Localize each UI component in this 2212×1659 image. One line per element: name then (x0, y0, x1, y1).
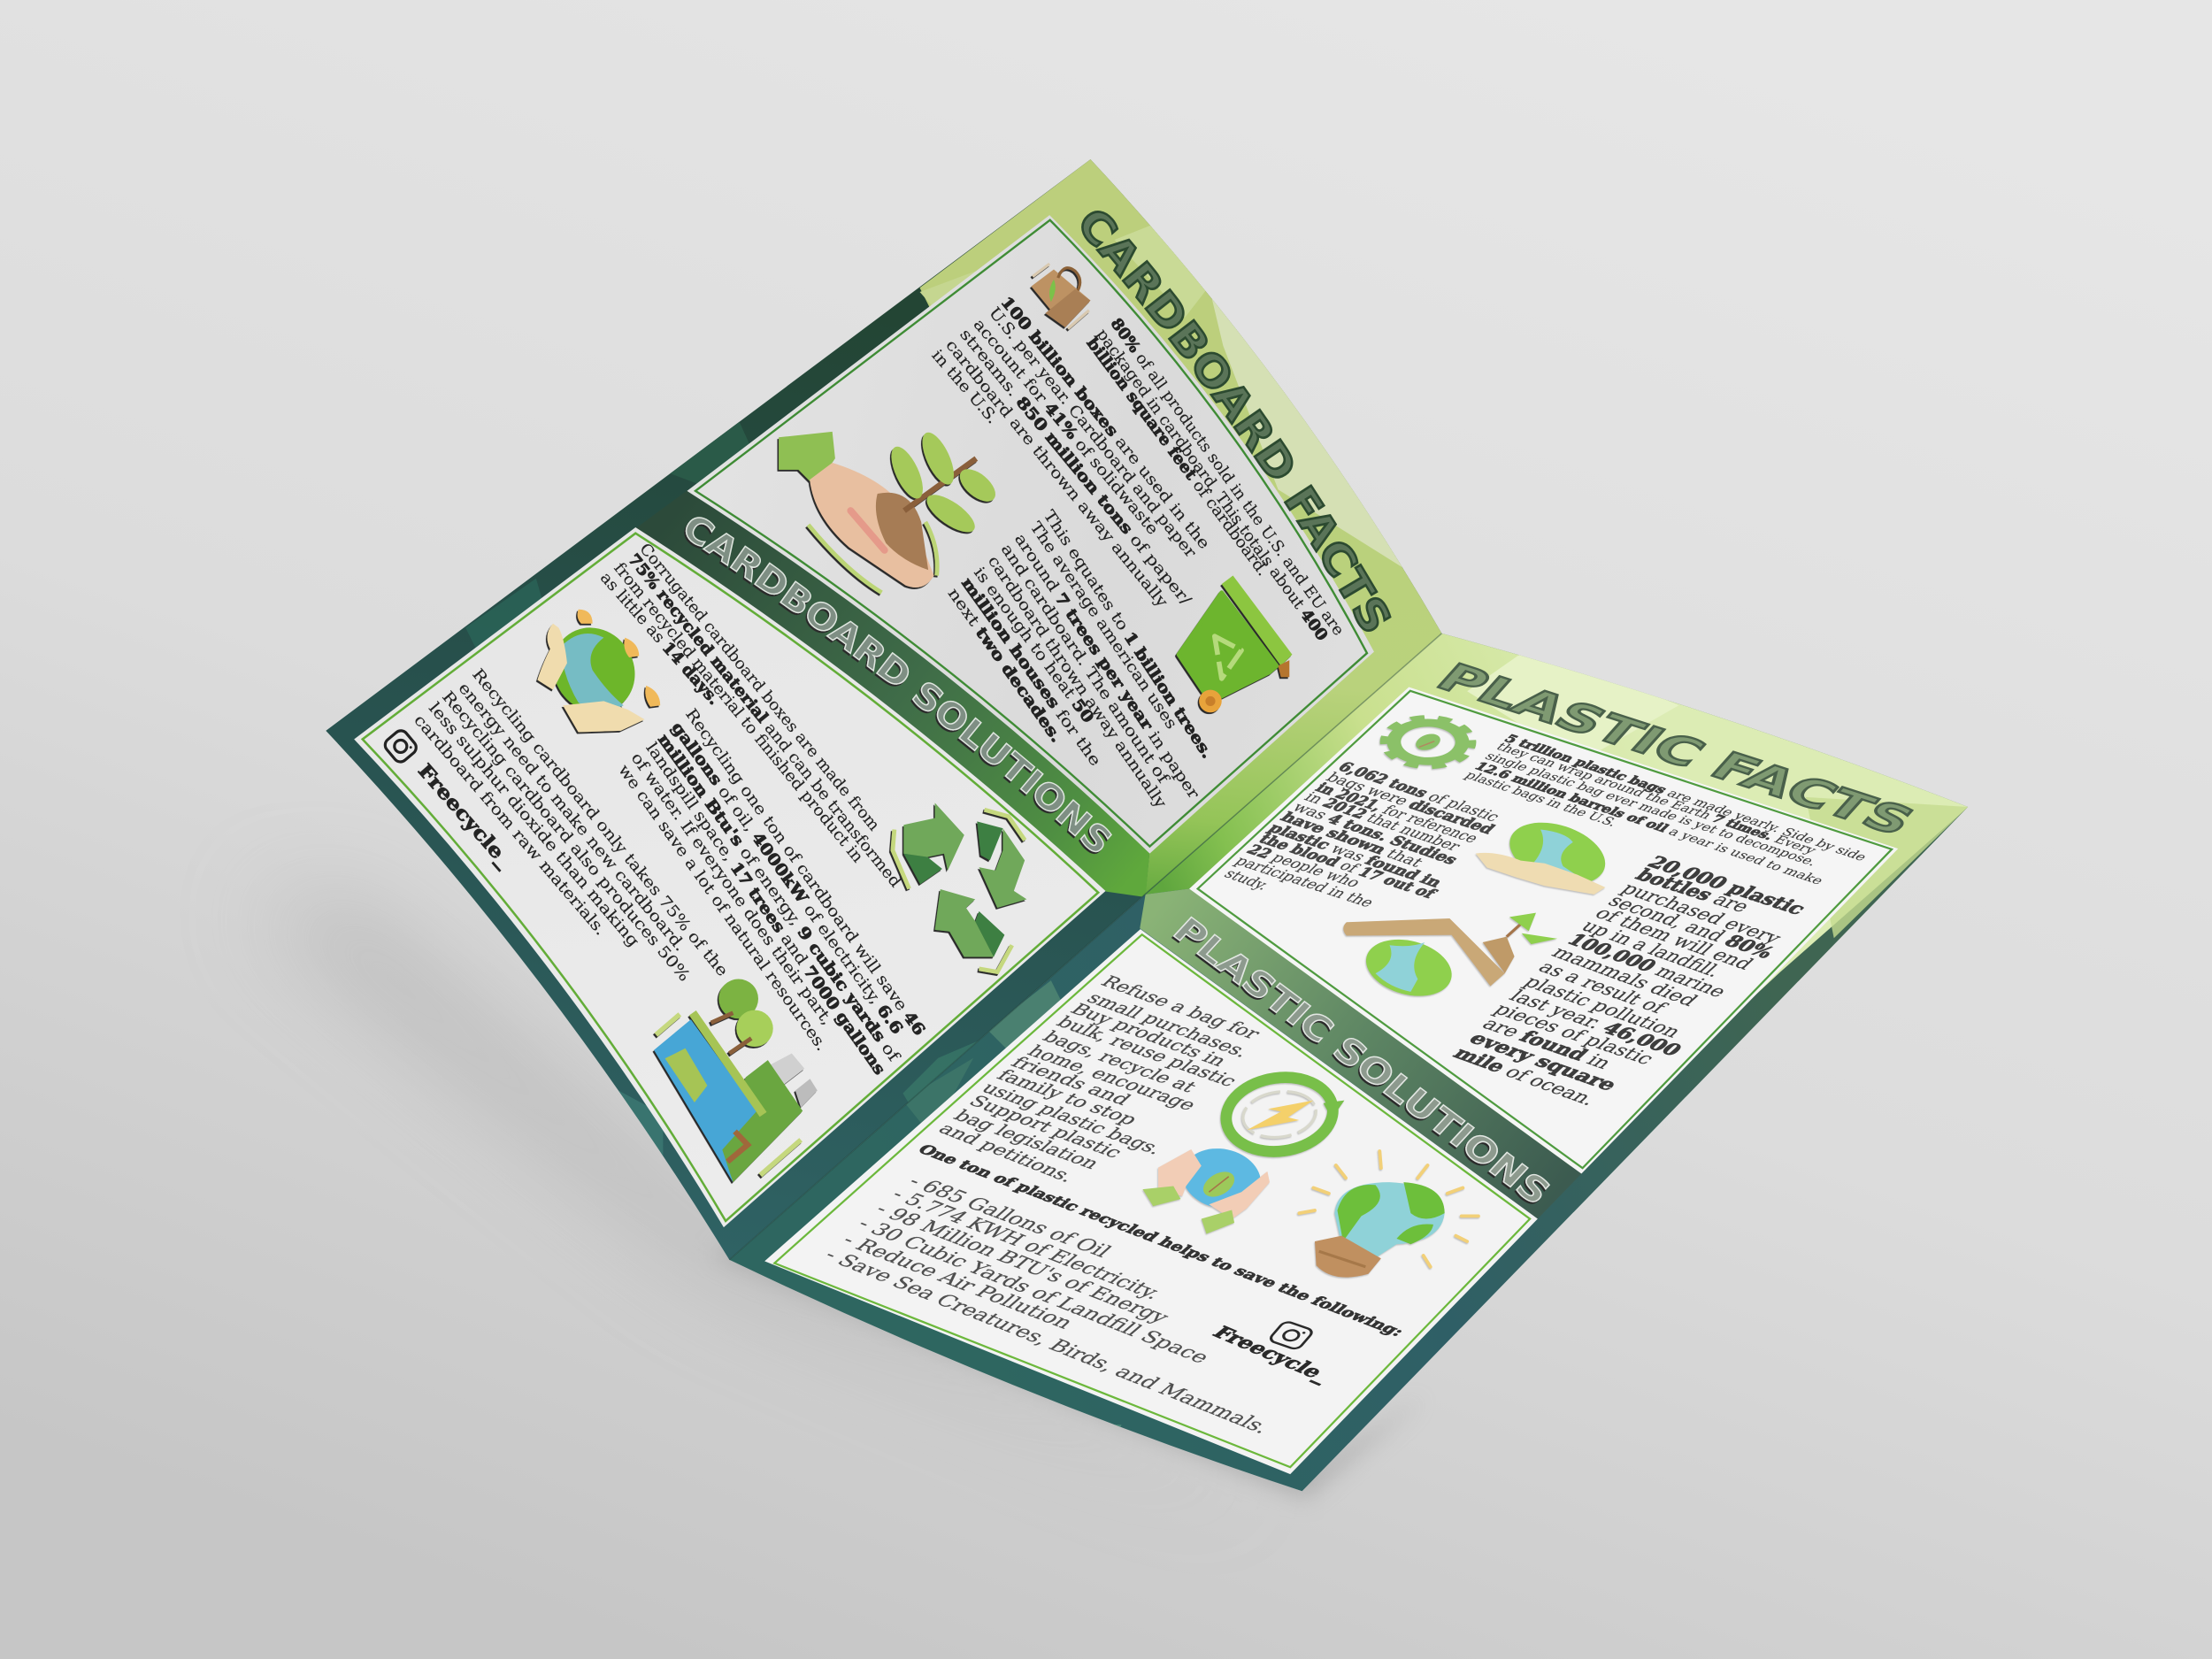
text block: 80 percent fact: 80% of all products sold in the U.S. and EU are (1107, 315, 1347, 639)
panel: plastic facts (1189, 687, 1898, 1174)
icon: earth resting on hand (1476, 811, 1613, 895)
handle: Freecycle: Freecycle_ (413, 760, 516, 872)
text block: refuse a bag: Refuse a bag for (1096, 972, 1266, 1042)
text block: 80 percent fact: billion square feet of cardboard. (1083, 334, 1271, 580)
text block: recycling one ton of cardboard: landspill space, 17 trees and 7000 gallons (642, 739, 889, 1079)
text block: recycling one ton of cardboard: million Btu's of energy, 9 cubic yards of (654, 731, 903, 1066)
center fold crease (729, 634, 1441, 1260)
icon: earth in hands (536, 610, 660, 732)
solutions band, left page (634, 489, 1149, 897)
text block: 1 billion trees: million houses for the (957, 575, 1104, 770)
text block: 20,000 plastic bottles: purchased every (1617, 879, 1787, 948)
text block: refuse a bag: friends and (1007, 1053, 1136, 1109)
text block: 20,000 plastic bottles: are found in (1478, 1014, 1617, 1072)
text block: 20,000 plastic bottles: 20,000 plastic (1643, 852, 1811, 918)
text block: 20,000 plastic bottles: of them will end (1590, 903, 1759, 973)
text block: 1 billion trees: is enough to heat 50 (970, 565, 1097, 726)
heading: plastic facts: PLASTIC FACTS (1426, 656, 1924, 844)
text block: 5 trillion plastic bags: 12.6 million barrels of oil a year is used to make (1471, 760, 1826, 887)
list: savings: - Save Sea Creatures, Birds, and Mammals. (818, 1246, 1276, 1438)
list: savings: - 30 Cubic Yards of Landfill Space (852, 1214, 1215, 1367)
text block: 20,000 plastic bottles: 100,000 marine (1563, 930, 1732, 1001)
text block: refuse a bag: bulk, reuse plastic (1052, 1012, 1242, 1090)
text block: refuse a bag (933, 972, 1266, 1186)
text block: corrugated cardboard: 75% recycled material and can be transformed (624, 550, 905, 891)
text block: recycling cardboard energy: Recycling cardboard only takes 75% of the (468, 665, 732, 980)
right page facets (902, 641, 1968, 1453)
text block: 5 trillion plastic bags: 5 trillion plastic bags are made yearly. Side by side (1501, 733, 1870, 864)
text block: recycling one ton of cardboard: gallons of oil, 4000kW of electricity, 6.6 (667, 718, 906, 1038)
text: one ton subheading: One ton of plastic recycled helps to save the following: (914, 1141, 1409, 1339)
text block: refuse a bag: using plastic bags. (977, 1079, 1169, 1158)
panel background (1189, 687, 1898, 1174)
icon: gear with leaf (1369, 709, 1487, 775)
handle: Freecycle: Freecycle_ (1207, 1323, 1339, 1386)
text block: refuse a bag: small purchases. (1082, 988, 1256, 1061)
icon: earth light bulb with rays (1299, 1151, 1479, 1278)
text block: 80 percent fact: packaged in cardboard. This totals about 400 (1093, 326, 1331, 644)
icon: kraft paper bag with leaf (1031, 264, 1090, 328)
brochure: left page, cardboard (326, 159, 1441, 1260)
text block: 1 billion trees: next two decades. (944, 585, 1065, 746)
left page paper (326, 159, 1441, 1260)
text block: 100 billion boxes: streams. 850 million tons of paper/ (956, 326, 1194, 609)
icon: instagram (382, 728, 419, 764)
text block: 1 billion trees: and cardboard. The amount of (997, 541, 1172, 788)
text block: 20,000 plastic bottles: mile of ocean. (1448, 1043, 1602, 1109)
text block: 1 billion trees: This equates to 1 billion trees. (1040, 507, 1216, 762)
text block: 6,062 tons: the blood of 17 out of (1255, 832, 1440, 902)
right page lime header (1146, 634, 1968, 1171)
panel background (764, 929, 1538, 1474)
heading: plastic solutions: PLASTIC SOLUTIONS (1165, 910, 1558, 1213)
text block: refuse a bag: bag legislation (949, 1106, 1105, 1172)
text block: 6,062 tons: in 2012 that number (1300, 789, 1465, 855)
text block: 6,062 tons (1219, 759, 1503, 910)
text block: 6,062 tons: 6,062 tons of plastic (1333, 759, 1503, 825)
right page paper (729, 634, 1968, 1491)
text block: recycling cardboard energy (410, 665, 732, 986)
text block: recycling cardboard energy: cardboard from raw materials. (410, 711, 610, 940)
text block: 20,000 plastic bottles (1448, 852, 1811, 1109)
icon: green recycling bin (1179, 576, 1292, 712)
icon: earth with arrow and sapling (1343, 913, 1557, 1005)
left page facets (465, 223, 1439, 1171)
text block: recycling cardboard energy: Recycling cardboard also produces 50% (438, 687, 694, 986)
text block: recycling cardboard energy: energy need to make new cardboard. (455, 679, 689, 955)
icon: city, factory and trees (654, 979, 818, 1182)
cast shadow beneath brochure (254, 902, 1425, 1517)
list: savings: - 5.774 KWH of Electricity. (886, 1185, 1167, 1303)
text block: 5 trillion plastic bags: they can wrap around the Earth 7 times. Every (1493, 741, 1819, 856)
text block: 6,062 tons: study. (1219, 866, 1273, 894)
icon: hand holding soil and sapling (779, 428, 1001, 593)
text block: 20,000 plastic bottles: every square (1464, 1028, 1623, 1094)
text block: recycling one ton of cardboard (614, 705, 929, 1079)
text block: refuse a bag: and petitions. (933, 1119, 1080, 1186)
panel: plastic solutions (764, 929, 1538, 1474)
text block: 20,000 plastic bottles: bottles are (1631, 865, 1755, 916)
text block: 100 billion boxes (928, 294, 1213, 611)
panel: cardboard facts (687, 215, 1374, 854)
text block: 100 billion boxes: account for 41% of solidwaste (970, 316, 1162, 539)
panel background (687, 215, 1374, 854)
text block: 5 trillion plastic bags: plastic bags in the U.S. (1462, 770, 1621, 829)
text block: 1 billion trees: The average american uses (1026, 518, 1180, 733)
text block: 1 billion trees: cardboard thrown away annually (984, 553, 1170, 811)
text block: 100 billion boxes: in the U.S. (928, 347, 1002, 427)
text block: 1 billion trees (944, 507, 1216, 811)
text block: recycling one ton of cardboard: of water. If everyone does their part, (627, 749, 836, 1029)
text block: 6,062 tons: 22 people who (1242, 842, 1364, 891)
text block: corrugated cardboard: as little as 14 days. (596, 569, 723, 709)
icon: recycling arrows (893, 803, 1026, 972)
text block: recycling one ton of cardboard: Recycling one ton of cardboard will save 46 (681, 705, 929, 1039)
text block: recycling one ton of cardboard: we can save a lot of natural resources. (614, 761, 831, 1055)
text block: 6,062 tons: participated in the (1231, 854, 1378, 910)
plastic solutions band (1140, 888, 1581, 1219)
text block: 5 trillion plastic bags (1462, 733, 1870, 887)
text block: 1 billion trees: around 7 trees per year in paper (1010, 531, 1202, 803)
text block: 6,062 tons: in 2021, for reference (1311, 780, 1482, 847)
text block: 100 billion boxes: 100 billion boxes are used in the (997, 294, 1213, 553)
text block: 6,062 tons: plastic was found in (1264, 821, 1446, 891)
text block: refuse a bag: home, encourage (1023, 1041, 1202, 1114)
text block: 20,000 plastic bottles: last year. 46,000 (1505, 986, 1687, 1059)
list: savings: - 685 Gallons of Oil (902, 1171, 1117, 1262)
text block: refuse a bag: bags, recycle at (1038, 1027, 1202, 1095)
text block: 20,000 plastic bottles: as a result of (1533, 957, 1673, 1018)
list: savings: - Reduce Air Pollution (836, 1231, 1079, 1333)
list: savings: - 98 Million BTU's of Energy (870, 1200, 1175, 1327)
text block: refuse a bag: Buy products in (1066, 1000, 1233, 1070)
text block: 20,000 plastic bottles: second, and 80% (1603, 891, 1779, 962)
icon: energy recycle ring (1221, 1071, 1344, 1158)
text block: refuse a bag: family to stop (992, 1066, 1143, 1128)
text block: 6,062 tons: bags were discarded (1322, 770, 1499, 837)
panel background (354, 527, 1106, 1227)
text block: 100 billion boxes: U.S. per year. Cardboard and paper (985, 304, 1200, 562)
text block: 20,000 plastic bottles: plastic pollution (1519, 972, 1687, 1041)
icon: hands holding blue globe with leaf (1142, 1141, 1270, 1233)
text block: 20,000 plastic bottles: pieces of plastic (1489, 999, 1660, 1068)
text block: 20,000 plastic bottles: mammals died (1547, 942, 1703, 1010)
text block: refuse a bag: Support plastic (964, 1092, 1128, 1162)
text block: recycling cardboard energy: less sulphur dioxide than making (425, 699, 643, 950)
text block: 20,000 plastic bottles: up in a landfill. (1577, 917, 1728, 980)
left page lime header (920, 159, 1441, 895)
text block: 6,062 tons: was 4 tons. Studies (1288, 800, 1462, 868)
text block: corrugated cardboard: from recycled material to finished product in (610, 559, 867, 866)
brochure: right page, plastic (729, 634, 1968, 1491)
panel: cardboard solutions (354, 527, 1106, 1227)
heading: cardboard solutions: CARDBOARD SOLUTIONS (684, 517, 1112, 855)
list: savings (818, 1171, 1276, 1438)
text block: 100 billion boxes: cardboard are thrown away annually (941, 336, 1171, 611)
text block: 6,062 tons: have shown that (1276, 810, 1427, 871)
heading: cardboard facts: CARDBOARD FACTS (1081, 211, 1392, 632)
text block: corrugated cardboard: Corrugated cardboard boxes are made from (635, 540, 883, 834)
icon: instagram (1268, 1321, 1315, 1350)
text block: 5 trillion plastic bags: single plastic bag ever made is yet to decompose. (1481, 750, 1821, 869)
